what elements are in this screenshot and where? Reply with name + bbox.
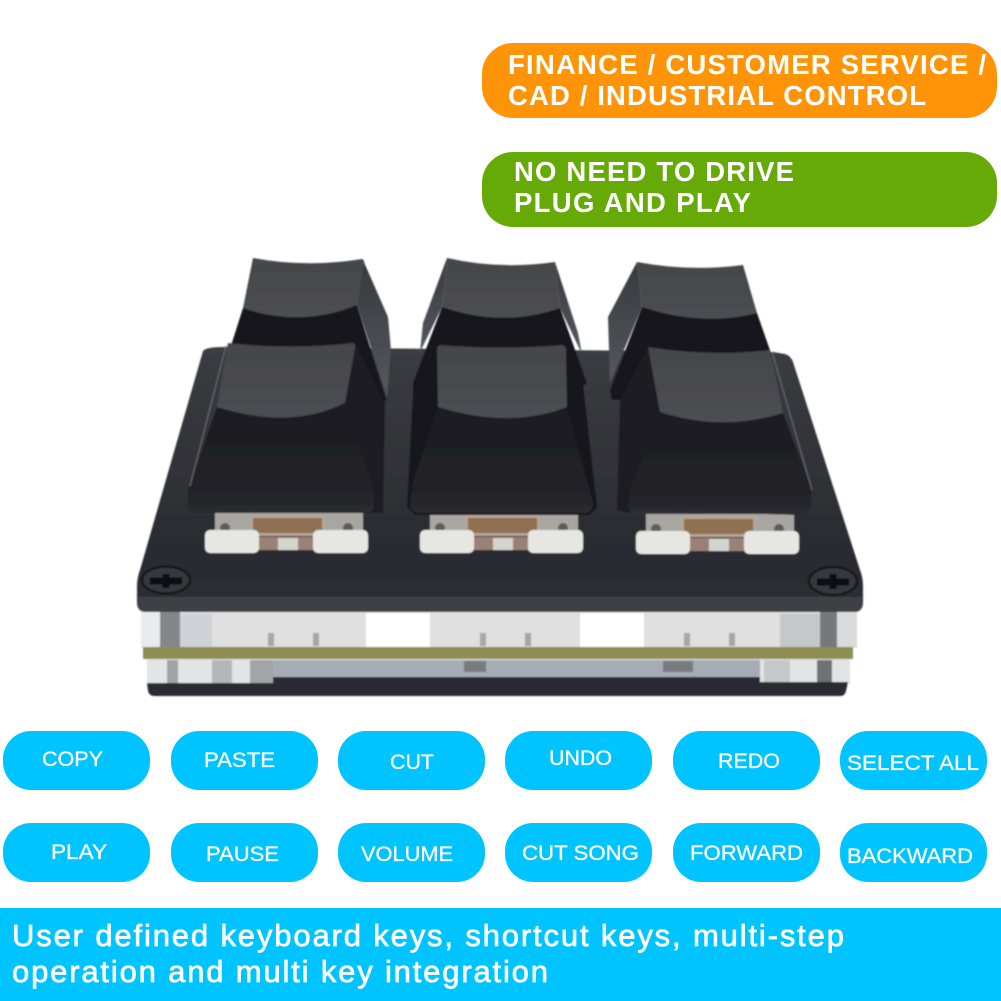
pill: play bbox=[3, 823, 150, 882]
badge: industries: CAD / INDUSTRIAL CONTROL bbox=[508, 80, 926, 111]
front left switch bbox=[205, 513, 368, 553]
footer banner bbox=[0, 908, 1001, 1001]
pill: undo: UNDO bbox=[549, 747, 612, 770]
pill: volume bbox=[338, 823, 485, 882]
pill: play: PLAY bbox=[51, 841, 107, 864]
pill: copy: COPY bbox=[42, 748, 103, 771]
pill: redo: REDO bbox=[718, 750, 780, 773]
back left keycap bbox=[229, 258, 391, 402]
adhesive strip bbox=[143, 647, 853, 659]
pill: copy bbox=[3, 731, 150, 790]
pill: pause: PAUSE bbox=[206, 843, 279, 866]
footer banner: operation and multi key integration bbox=[12, 954, 548, 989]
pill: forward bbox=[673, 823, 820, 882]
front right keycap bbox=[617, 347, 812, 515]
screw right bbox=[809, 567, 857, 595]
product: six-key keypad bbox=[137, 258, 863, 696]
badge: industries bbox=[482, 43, 997, 118]
badge: plug and play bbox=[482, 152, 997, 227]
badge: plug and play: PLUG AND PLAY bbox=[514, 187, 751, 218]
badge: plug and play: NO NEED TO DRIVE bbox=[514, 156, 794, 187]
pill: cut song: CUT SONG bbox=[522, 842, 639, 865]
pill: paste bbox=[171, 731, 318, 790]
pill: backward bbox=[840, 823, 987, 882]
front right switch bbox=[636, 514, 799, 554]
front centre keycap bbox=[407, 345, 597, 515]
pill: select all bbox=[840, 731, 987, 790]
pill: select all: SELECT ALL bbox=[847, 752, 979, 775]
badge: industries: FINANCE / CUSTOMER SERVICE / bbox=[508, 49, 986, 80]
front left keycap bbox=[188, 343, 385, 513]
base plate bbox=[147, 677, 848, 696]
pill: cut song bbox=[505, 823, 652, 882]
back centre keycap bbox=[413, 258, 587, 400]
pill: pause bbox=[171, 823, 318, 882]
plate front edge bbox=[138, 597, 862, 612]
footer banner: User defined keyboard keys, shortcut keys, multi-step bbox=[12, 918, 844, 953]
front centre switch bbox=[420, 513, 583, 553]
top plate bbox=[137, 347, 863, 612]
pill: volume: VOLUME bbox=[361, 843, 453, 866]
pill: forward: FORWARD bbox=[690, 842, 803, 865]
pill: undo bbox=[505, 731, 652, 790]
pill: cut bbox=[338, 731, 485, 790]
acrylic layers bbox=[141, 611, 857, 684]
screw left bbox=[142, 566, 190, 594]
shortcut pills: row 2 bbox=[3, 823, 987, 882]
pill: cut: CUT bbox=[390, 751, 434, 774]
pill: redo bbox=[673, 731, 820, 790]
pill: paste: PASTE bbox=[204, 749, 275, 772]
shortcut pills: row 1 bbox=[3, 731, 987, 790]
pill: backward: BACKWARD bbox=[847, 845, 973, 868]
back right keycap bbox=[608, 262, 772, 400]
